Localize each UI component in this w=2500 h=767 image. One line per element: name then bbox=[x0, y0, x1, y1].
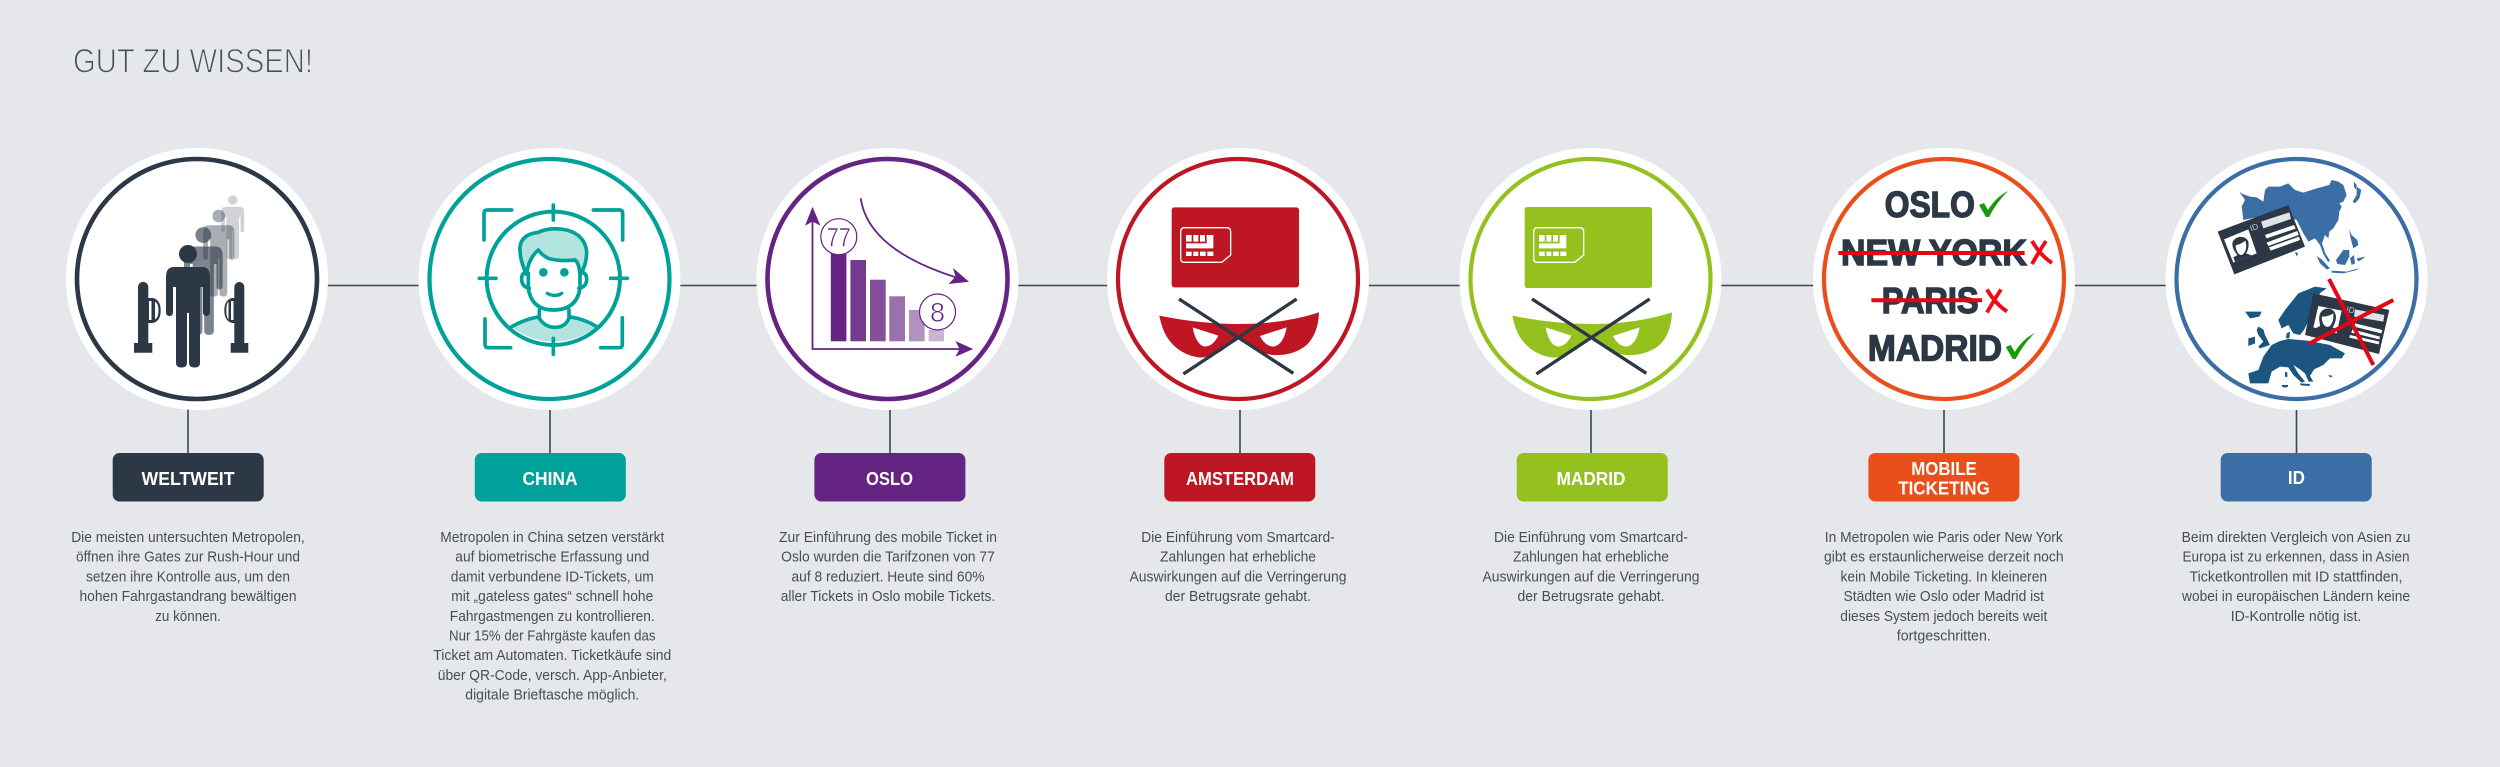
text: Oslo: Oslo wurden die Tarifzonen von 77 bbox=[781, 549, 995, 566]
text: Madrid: Die Einführung vom Smartcard- bbox=[1494, 529, 1688, 546]
badge circle: China bbox=[418, 148, 680, 410]
panel: China bbox=[418, 148, 680, 704]
text: ID: wobei in europäischen Ländern keine bbox=[2181, 588, 2410, 605]
text: Oslo: Zur Einführung des mobile Ticket in bbox=[779, 529, 997, 546]
text: China: Nur 15% der Fahrgäste kaufen das bbox=[449, 628, 656, 644]
city list with checks and crosses bbox=[1838, 184, 2052, 368]
text: Madrid bbox=[1482, 529, 1700, 605]
chart: tariff zones reduced from 77 to 8: 77 bbox=[827, 222, 851, 252]
text: Amsterdam: der Betrugsrate gehabt. bbox=[1165, 588, 1311, 605]
badge circle: Madrid bbox=[1460, 148, 1722, 410]
chart: tariff zones reduced from 77 to 8 bbox=[805, 198, 973, 357]
text: ID: ID-Kontrolle nötig ist. bbox=[2231, 608, 2361, 625]
text: Weltweit: öffnen ihre Gates zur Rush-Hour und bbox=[76, 549, 300, 566]
panel: Oslo bbox=[756, 148, 1018, 605]
city list with checks and crosses: PARIS bbox=[1882, 280, 1979, 321]
badge circle: Oslo bbox=[756, 148, 1018, 410]
text: Mobile Ticketing: dieses System jedoch bereits weit bbox=[1840, 608, 2048, 625]
icon: smartcard with crossed-out fraud mask bbox=[1159, 207, 1319, 374]
text: ID bbox=[2181, 529, 2410, 625]
text: Mobile Ticketing: gibt es erstaunlicherweise derzeit noch bbox=[1824, 549, 2064, 566]
icon: Europe map with crossed-out ID card bbox=[2245, 279, 2393, 387]
tag: Oslo bbox=[814, 453, 965, 502]
badge circle: Amsterdam bbox=[1107, 148, 1369, 410]
tag: Amsterdam bbox=[1164, 453, 1315, 502]
text: Madrid: Zahlungen hat erhebliche bbox=[1513, 549, 1669, 566]
tag: Weltweit bbox=[113, 453, 264, 502]
chart: tariff zones reduced from 77 to 8: 8 bbox=[930, 298, 945, 328]
text: Weltweit: setzen ihre Kontrolle aus, um den bbox=[86, 568, 290, 585]
tag: Mobile Ticketing: MOBILE bbox=[1911, 459, 1977, 479]
text: China: Ticket am Automaten. Ticketkäufe sind bbox=[433, 647, 671, 664]
panel: ID bbox=[2166, 148, 2428, 625]
text: Amsterdam: Auswirkungen auf die Verringerung bbox=[1130, 568, 1346, 585]
tag: Madrid bbox=[1517, 453, 1668, 502]
badge circle: Weltweit bbox=[66, 148, 328, 410]
panel: Mobile Ticketing bbox=[1813, 148, 2075, 644]
text: China: über QR-Code, versch. App-Anbieter, bbox=[438, 667, 667, 684]
icon: Asia map with ID card: ID bbox=[2248, 221, 2260, 233]
text: China: mit „gateless gates“ schnell hohe bbox=[451, 588, 653, 605]
icon: smartcard with crossed-out fraud mask bbox=[1512, 207, 1672, 374]
text: China: digitale Brieftasche möglich. bbox=[465, 687, 639, 704]
text: Amsterdam: Zahlungen hat erhebliche bbox=[1160, 549, 1316, 566]
text: Amsterdam bbox=[1130, 529, 1346, 605]
icon: Europe map with crossed-out ID card: ID bbox=[2345, 304, 2356, 316]
text: Weltweit bbox=[71, 529, 305, 625]
panel: Weltweit bbox=[66, 148, 328, 625]
text: Amsterdam: Die Einführung vom Smartcard- bbox=[1141, 529, 1335, 546]
title: GUT ZU WISSEN! bbox=[73, 42, 313, 80]
city list with checks and crosses: OSLO bbox=[1885, 184, 1975, 225]
panel: Madrid bbox=[1460, 148, 1722, 605]
text: Oslo bbox=[779, 529, 997, 605]
text: China: Fahrgastmengen zu kontrollieren. bbox=[450, 608, 655, 625]
badge circle: Mobile Ticketing bbox=[1813, 148, 2075, 410]
city list with checks and crosses: MADRID bbox=[1868, 328, 2002, 368]
tag: ID: ID bbox=[2288, 468, 2305, 488]
tag: Mobile Ticketing bbox=[1868, 453, 2019, 502]
tag: Weltweit: WELTWEIT bbox=[142, 469, 235, 489]
text: Mobile Ticketing: kein Mobile Ticketing. In kleineren bbox=[1841, 568, 2047, 585]
tag: Amsterdam: AMSTERDAM bbox=[1186, 469, 1294, 489]
text: Mobile Ticketing: In Metropolen wie Paris oder New York bbox=[1825, 529, 2063, 546]
tag: China: CHINA bbox=[522, 469, 578, 489]
text: Weltweit: zu können. bbox=[155, 608, 221, 625]
text: Mobile Ticketing: Städten wie Oslo oder Madrid ist bbox=[1844, 588, 2045, 605]
text: Mobile Ticketing bbox=[1824, 529, 2064, 644]
tag: Oslo: OSLO bbox=[866, 469, 913, 489]
tag: Madrid: MADRID bbox=[1556, 469, 1626, 489]
text: ID: Ticketkontrollen mit ID stattfinden, bbox=[2190, 568, 2402, 585]
text: ID: Beim direkten Vergleich von Asien zu bbox=[2182, 529, 2410, 546]
text: Mobile Ticketing: fortgeschritten. bbox=[1897, 628, 1991, 644]
tag: China bbox=[475, 453, 626, 502]
text: Oslo: auf 8 reduziert. Heute sind 60% bbox=[792, 568, 984, 585]
panel: Amsterdam bbox=[1107, 148, 1369, 605]
text: Weltweit: hohen Fahrgastandrang bewältigen bbox=[80, 588, 296, 605]
icon: Asia map with ID card bbox=[2218, 180, 2365, 274]
text: China: damit verbundene ID-Tickets, um bbox=[451, 568, 654, 585]
text: Madrid: Auswirkungen auf die Verringerung bbox=[1482, 568, 1700, 585]
icon: people passing through gates bbox=[134, 195, 248, 368]
city list with checks and crosses: NEW YORK bbox=[1841, 232, 2027, 273]
text: China bbox=[433, 529, 671, 704]
text: Madrid: der Betrugsrate gehabt. bbox=[1518, 588, 1664, 605]
tag: Mobile Ticketing: TICKETING bbox=[1898, 479, 1990, 499]
text: ID: Europa ist zu erkennen, dass in Asien bbox=[2182, 549, 2410, 566]
text: China: auf biometrische Erfassung und bbox=[455, 549, 649, 566]
text: Oslo: aller Tickets in Oslo mobile Tickets. bbox=[781, 588, 995, 605]
text: Weltweit: Die meisten untersuchten Metropolen, bbox=[71, 529, 305, 546]
tag: ID bbox=[2221, 453, 2372, 502]
timeline connector bbox=[188, 286, 2297, 453]
badge circle: ID bbox=[2166, 148, 2428, 410]
text: China: Metropolen in China setzen verstärkt bbox=[440, 529, 665, 546]
icon: biometric face scan bbox=[479, 205, 627, 354]
